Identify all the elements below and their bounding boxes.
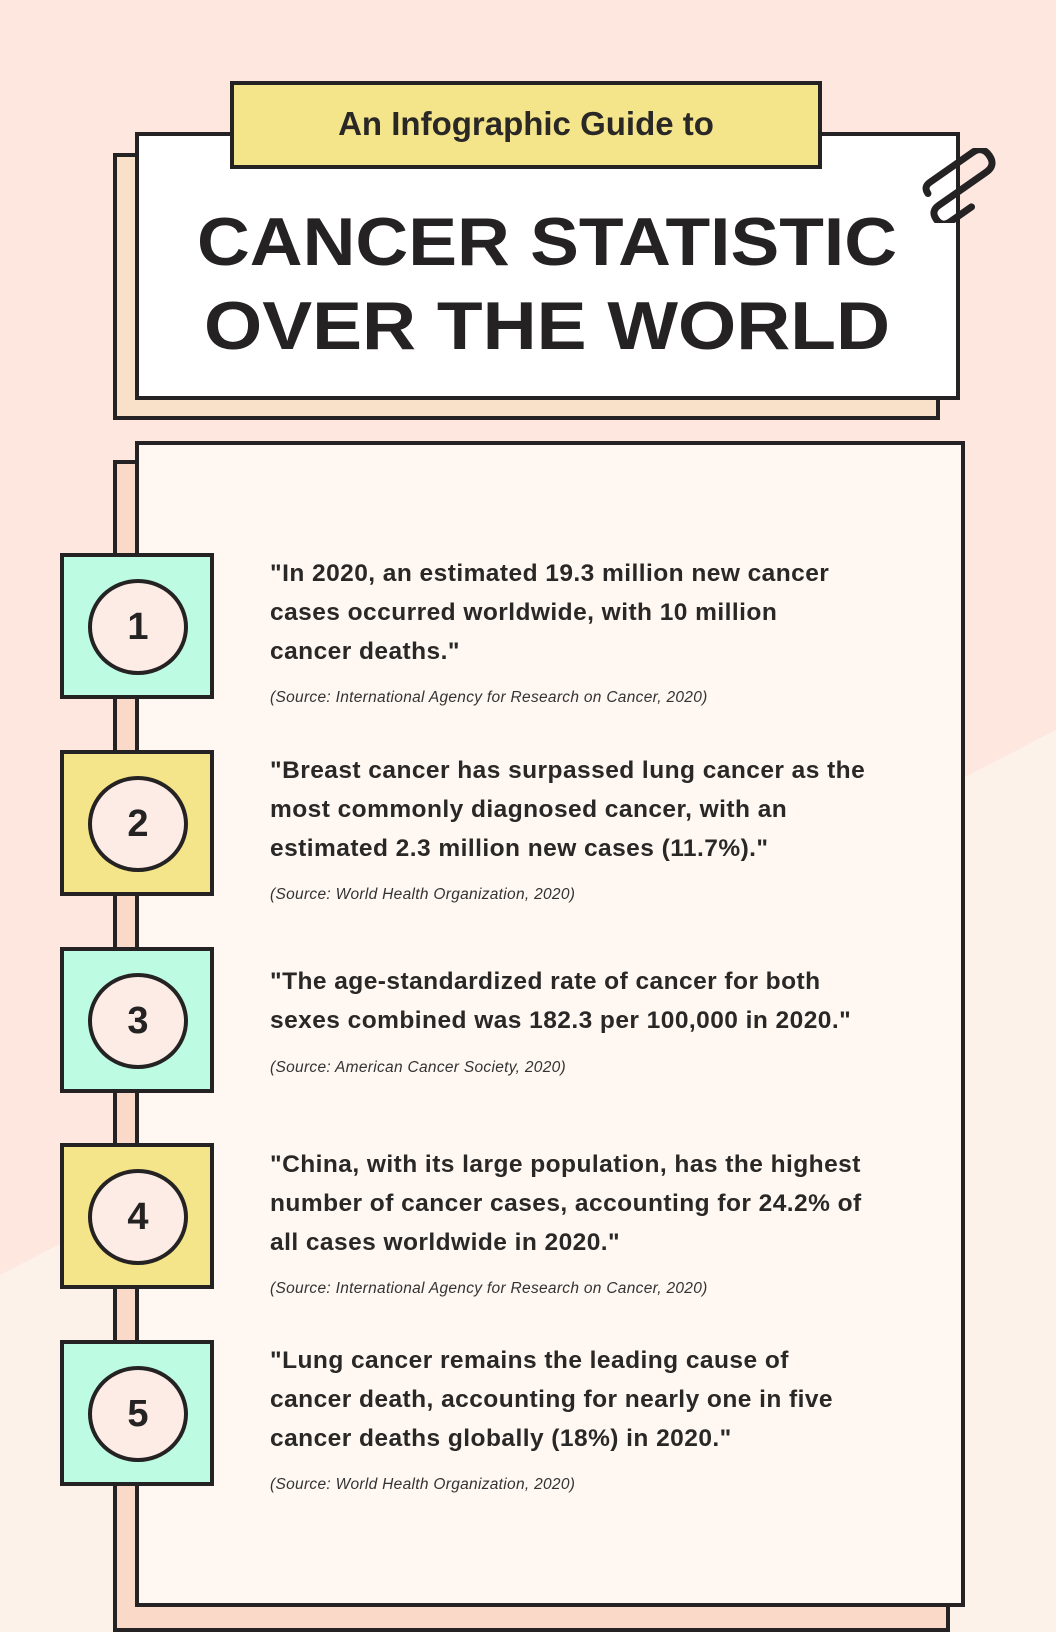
item 4 [60, 1143, 862, 1297]
title text: CANCER STATISTIC [197, 204, 897, 280]
text 5: cancer death, accounting for nearly one in five [270, 1386, 833, 1413]
subtitle label: An Infographic Guide to [338, 105, 714, 142]
text 2 [270, 757, 865, 862]
text 1: cases occurred worldwide, with 10 million [270, 599, 777, 626]
text 5: cancer deaths globally (18%) in 2020." [270, 1425, 732, 1452]
number box 3 [60, 947, 214, 1093]
text 1 [270, 560, 829, 665]
text 3 [270, 968, 851, 1034]
source 5: (Source: World Health Organization, 2020) [270, 1476, 575, 1493]
number box 2: 2 [127, 803, 149, 845]
text 4: all cases worldwide in 2020." [270, 1229, 620, 1256]
number box 4 [60, 1143, 214, 1289]
text 1: "In 2020, an estimated 19.3 million new cancer [270, 560, 829, 587]
number box 5: 5 [127, 1393, 149, 1435]
number box 1 [60, 553, 214, 699]
text 1: cancer deaths." [270, 638, 460, 665]
title box [135, 132, 960, 400]
number box 3: 3 [127, 1000, 149, 1042]
text 5: "Lung cancer remains the leading cause of [270, 1347, 789, 1374]
number box 1: 1 [127, 606, 149, 648]
text 4: "China, with its large population, has the highest [270, 1151, 861, 1178]
source 4: (Source: International Agency for Research on Cancer, 2020) [270, 1280, 708, 1297]
text 3: sexes combined was 182.3 per 100,000 in 2020." [270, 1007, 851, 1034]
text 2: estimated 2.3 million new cases (11.7%)." [270, 835, 768, 862]
text 2: "Breast cancer has surpassed lung cancer as the [270, 757, 865, 784]
source 1: (Source: International Agency for Research on Cancer, 2020) [270, 689, 708, 706]
number box 5 [60, 1340, 214, 1486]
main panel [135, 441, 965, 1607]
text 5 [270, 1347, 833, 1452]
item 5 [60, 1340, 833, 1493]
title shadow box [113, 153, 940, 420]
number box 2 [60, 750, 214, 896]
item 2 [60, 750, 865, 903]
number box 4: 4 [127, 1196, 149, 1238]
icon: paperclip [922, 148, 996, 223]
text 4 [270, 1151, 862, 1256]
subtitle label [230, 81, 822, 169]
source 3: (Source: American Cancer Society, 2020) [270, 1059, 566, 1076]
title text: OVER THE WORLD [204, 288, 890, 364]
item 3 [60, 947, 851, 1093]
main panel shadow [113, 460, 950, 1632]
title text [197, 204, 897, 364]
source 2: (Source: World Health Organization, 2020) [270, 886, 575, 903]
text 3: "The age-standardized rate of cancer for both [270, 968, 821, 995]
item 1 [60, 553, 829, 706]
text 4: number of cancer cases, accounting for 24.2% of [270, 1190, 862, 1217]
text 2: most commonly diagnosed cancer, with an [270, 796, 787, 823]
